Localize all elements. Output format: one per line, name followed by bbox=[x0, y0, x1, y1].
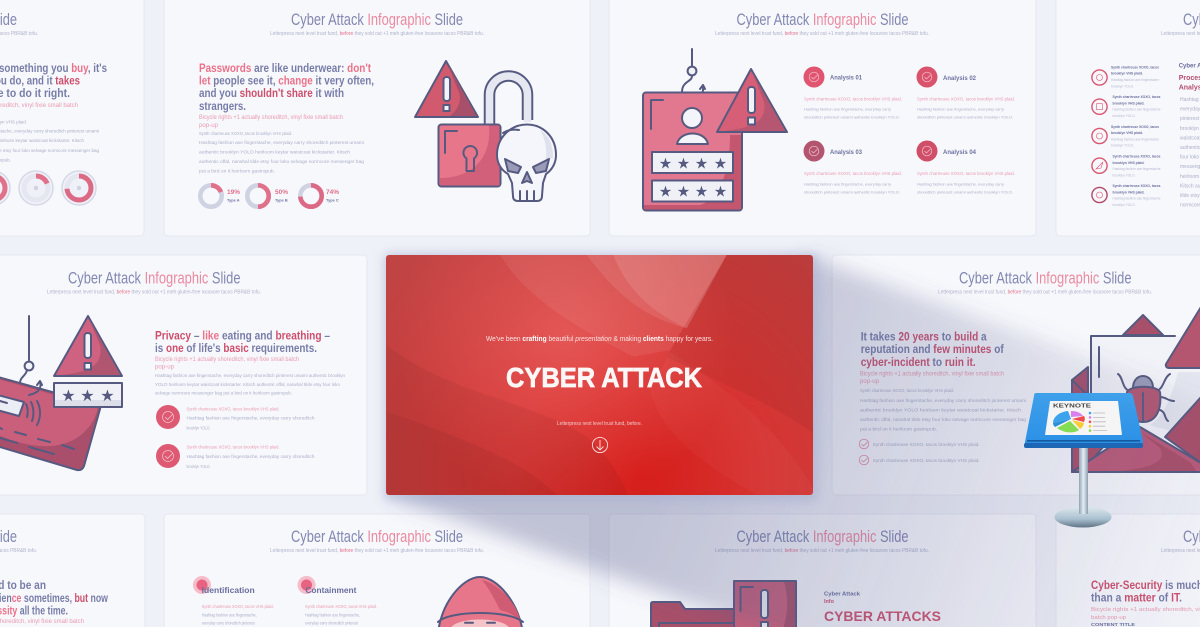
body text: CONTENT TITLE bbox=[1091, 622, 1135, 627]
list items: brooklyn YOLO. bbox=[1112, 203, 1136, 207]
stand bbox=[1054, 447, 1112, 528]
list items: Synth chartreuse XOXO, tacos bbox=[1112, 183, 1161, 188]
heading bbox=[1091, 580, 1200, 604]
heading: It takes 20 years to build a bbox=[861, 332, 987, 344]
panel: identification slide bbox=[164, 514, 590, 627]
list items bbox=[1111, 64, 1161, 207]
slide title: Cyber Attack Infographic Slide bbox=[291, 11, 463, 29]
item: analysis 04: Analysis 04 bbox=[943, 150, 977, 156]
item: analysis 03 bbox=[804, 140, 902, 194]
body text: pop-up bbox=[199, 123, 219, 129]
main title: CYBER ATTACK bbox=[506, 362, 702, 393]
body text: selvage normcore messenger bag put a bird on it heirloom gastropub. bbox=[155, 390, 292, 396]
panel: cyber attack hero card bbox=[386, 255, 813, 495]
list items: Synth chartreuse XOXO, tacos bbox=[1112, 154, 1161, 158]
body text bbox=[199, 115, 365, 174]
icon: folder and document bbox=[651, 581, 796, 627]
list items: brooklyn VHS plaid. bbox=[1111, 130, 1143, 135]
item: containment: Synth chartreuse XOXO, tacos VHS plaid. bbox=[305, 604, 377, 609]
body text: Bicycle rights +1 actually shoreditch, vinyl fixie small batch bbox=[860, 372, 1004, 378]
icon: padlock bbox=[438, 76, 528, 186]
icon: id card: ★ bbox=[695, 156, 708, 172]
list items: brooklyn VHS plaid. bbox=[1111, 70, 1143, 76]
icon rings bbox=[1092, 70, 1107, 203]
body text: Hashtag fashion axe fingerstache, everyday carry shoreditch pinterest umami bbox=[199, 140, 364, 145]
panel: passwords slide bbox=[164, 0, 590, 236]
donut charts: 74% bbox=[326, 189, 339, 196]
subtitle: Letterpress next level trust fund, before they sold out +1 meh gluten-free locavore tacos PBR&B tofu. bbox=[47, 290, 261, 296]
heading: and you shouldn't share it with bbox=[199, 88, 344, 100]
tagline: We've been crafting beautiful presentation & making clients happy for years. bbox=[486, 334, 713, 343]
slide title: Cyber Attack Infographic Slide bbox=[736, 11, 908, 29]
body text: put a bird on it heirloom gastropub. bbox=[199, 168, 275, 174]
body text: put a bird on it heirloom gastropub. bbox=[860, 426, 937, 432]
item: identification bbox=[193, 576, 274, 625]
item: analysis 01: shoreditch pinterest umami authentic brooklyn YOLO. bbox=[804, 115, 900, 120]
panel: security top-left slide bbox=[0, 0, 144, 236]
donut charts: Type B bbox=[275, 198, 288, 202]
heading bbox=[199, 63, 374, 113]
right column text bbox=[1179, 64, 1200, 209]
item: analysis 03: Hashtag fashion axe fingerstache, everyday carry bbox=[804, 182, 891, 186]
subtitle: Letterpress next level trust fund, before they sold out +1 meh gluten-free locavore tacos PBR&B tofu. bbox=[715, 31, 929, 37]
item: check one bbox=[156, 405, 315, 430]
heading: something you buy, it's bbox=[0, 63, 107, 75]
heading: than a matter of IT. bbox=[1091, 592, 1182, 604]
icon: warning with password: ★ bbox=[100, 388, 115, 405]
item: check two bbox=[156, 444, 315, 469]
text block: CYBER ATTACKS bbox=[824, 608, 941, 624]
body text: pop-up bbox=[860, 379, 880, 385]
item: check one: brooklyn YOLO. bbox=[186, 426, 210, 430]
panel: reputation slide bbox=[832, 255, 1200, 495]
body text: YOLO heirloom keytar waistcoat kickstarter. Kitsch authentic offal, narwhal tilde etsy four loko bbox=[155, 382, 340, 387]
item: analysis 02: Hashtag fashion axe fingerstache, everyday carry bbox=[917, 107, 1004, 112]
icon: id card: ★ bbox=[714, 156, 727, 172]
list items: Synth chartreuse XOXO, tacos bbox=[1111, 124, 1160, 129]
item: containment: Hashtag fashion axe fingerstache, bbox=[305, 613, 360, 618]
panel: process analysis slide bbox=[1056, 0, 1200, 236]
donut charts: Type C bbox=[326, 198, 339, 202]
donut charts bbox=[200, 185, 339, 207]
icon: warning triangle bbox=[415, 61, 478, 117]
slide title: Cyber Attack Infographic Slide bbox=[736, 528, 908, 546]
icon: id card: ★ bbox=[695, 184, 708, 200]
slide title: Cyber Attack Infographic Slide bbox=[959, 270, 1132, 288]
panel: cyber attacks info slide bbox=[609, 514, 1036, 627]
icon: id card: ★ bbox=[659, 156, 672, 172]
item: analysis 04 bbox=[916, 140, 1015, 194]
keynote label: KEYNOTE bbox=[1053, 404, 1092, 410]
heading: is one of life's basic requirements. bbox=[155, 343, 317, 355]
body text: Bicycle rights +1 actually shoreditch, vinyl fixie small batch bbox=[199, 115, 343, 121]
item: analysis 02: Synth chartreuse XOXO, tacos brooklyn VHS plaid. bbox=[917, 97, 1015, 102]
icon: down arrow bbox=[592, 437, 608, 453]
podium top bbox=[1024, 393, 1143, 448]
icon: id card: ★ bbox=[677, 184, 690, 200]
heading bbox=[0, 580, 108, 618]
text block bbox=[824, 592, 941, 624]
heading: let people see it, change it very often, bbox=[199, 76, 374, 88]
icon: skull bbox=[497, 124, 556, 201]
check list: Synth chartreuse XOXO, tacos brooklyn VHS plaid. bbox=[873, 442, 980, 447]
item: analysis 02 bbox=[916, 66, 1015, 120]
list items: Synth chartreuse XOXO, tacos bbox=[1111, 64, 1160, 70]
heading bbox=[0, 63, 107, 100]
body text: Bicycle rights +1 actually shoreditch, vinyl fixie small batch bbox=[155, 357, 299, 363]
body text bbox=[1091, 607, 1200, 627]
icon: id card bbox=[643, 92, 742, 210]
body text: authentic brooklyn YOLO heirloom keytar waistcoat kickstarter. Kitsch bbox=[199, 150, 351, 154]
heading: cyber-incident to ruin it. bbox=[861, 357, 976, 369]
donut charts: 50% bbox=[275, 189, 288, 196]
panel: privacy slide bbox=[0, 255, 367, 495]
donut charts: 19% bbox=[227, 189, 240, 196]
item: analysis 04: shoreditch pinterest umami authentic brooklyn YOLO. bbox=[917, 190, 1013, 194]
item: analysis 01: Analysis 01 bbox=[830, 76, 863, 82]
icon: warning with password: ★ bbox=[80, 388, 95, 405]
body text: Hashtag fashion axe fingerstache, everyday carry shoreditch pinterest umami authentic brooklyn bbox=[155, 373, 345, 378]
check list: Synth chartreuse XOXO, tacos brooklyn VHS plaid. bbox=[873, 458, 980, 463]
list items: brooklyn VHS plaid. bbox=[1112, 160, 1144, 165]
item: identification: Identification bbox=[202, 586, 255, 595]
heading: Passwords are like underwear: don't bbox=[199, 63, 371, 75]
item: analysis 02: Analysis 02 bbox=[943, 76, 977, 82]
item: analysis 03: Analysis 03 bbox=[830, 150, 863, 156]
list items: brooklyn VHS plaid. bbox=[1112, 100, 1144, 106]
item: analysis 04: Synth chartreuse XOXO, tacos brooklyn VHS plaid. bbox=[917, 171, 1015, 176]
item: analysis 01: Synth chartreuse XOXO, tacos brooklyn VHS plaid. bbox=[804, 97, 902, 102]
icon: credit card on hook bbox=[0, 316, 100, 470]
slide sheet bbox=[1045, 401, 1122, 435]
heading: reputation and few minutes of bbox=[861, 344, 1004, 356]
item: containment: everyday carry shoreditch pinterest bbox=[305, 620, 359, 625]
item: analysis 02: shoreditch pinterest umami authentic brooklyn YOLO. bbox=[917, 115, 1013, 120]
body text: authentic offal, narwhal tilde etsy four loko selvage normcore messenger bag bbox=[199, 159, 365, 164]
pie chart bbox=[1053, 411, 1085, 432]
text block: Info bbox=[824, 599, 835, 605]
subtitle: Letterpress next level trust fund, before they sold out +1 meh gluten-free locavore tacos PBR&B tofu. bbox=[270, 31, 484, 37]
item: containment: Containment bbox=[305, 586, 357, 595]
icon: warning triangle bbox=[717, 69, 787, 132]
body text: Bicycle rights +1 actually shoreditch, vinyl fixie bbox=[1091, 607, 1200, 613]
icon: id card: ★ bbox=[659, 184, 672, 200]
panel: cyber-security slide bbox=[1056, 514, 1200, 627]
list items: Synth chartreuse XOXO, tacos bbox=[1112, 94, 1161, 99]
list items: brooklyn YOLO. bbox=[1112, 114, 1136, 118]
item: identification: everyday carry shoreditch pinterest bbox=[202, 620, 255, 625]
icon: keynote app bbox=[1024, 393, 1143, 528]
icon: id card: ★ bbox=[714, 184, 727, 200]
list items: Hashtag fashion axe fingerstache bbox=[1111, 137, 1159, 141]
body text bbox=[860, 372, 1027, 432]
list items: Hashtag fashion axe fingerstache bbox=[1112, 167, 1160, 171]
list items: Hashtag fashion axe fingerstache bbox=[1112, 108, 1160, 112]
icon: hook bbox=[682, 49, 705, 100]
list items: brooklyn VHS plaid. bbox=[1112, 190, 1144, 194]
text block: Cyber Attack bbox=[824, 592, 860, 598]
card glow bbox=[384, 253, 818, 501]
item: check two: Hashtag fashion axe fingerstache, everyday carry shoreditch bbox=[186, 454, 315, 459]
item: analysis 03: Synth chartreuse XOXO, tacos brooklyn VHS plaid. bbox=[804, 171, 902, 176]
body text: Hashtag fashion axe fingerstache, everyday carry shoreditch pinterest umami bbox=[860, 398, 1026, 403]
item: analysis 01 bbox=[804, 66, 902, 120]
pie legend bbox=[1089, 412, 1107, 432]
subtitle: Letterpress next level trust fund, before they sold out +1 meh gluten-free locavore tacos PBR&B tofu. bbox=[938, 290, 1152, 296]
donut charts: Type A bbox=[227, 198, 240, 202]
item: identification: Hashtag fashion axe fingerstache, bbox=[202, 613, 257, 618]
icon: hooded hacker bbox=[438, 577, 523, 627]
item: identification: Synth chartreuse XOXO, tacos VHS plaid. bbox=[202, 604, 274, 609]
item: analysis 03: shoreditch pinterest umami authentic brooklyn YOLO. bbox=[804, 190, 900, 194]
background waves bbox=[387, 255, 813, 495]
list items: brooklyn YOLO. bbox=[1112, 174, 1136, 178]
body text: authentic offal, narwhal tilde etsy four loko selvage normcore messenger bag bbox=[860, 417, 1027, 422]
item: check two: brooklyn YOLO. bbox=[186, 464, 210, 469]
item: check one: Synth chartreuse XOXO, tacos brooklyn VHS plaid. bbox=[186, 406, 280, 412]
body text: pop-up bbox=[155, 364, 175, 370]
progress dials bbox=[0, 171, 96, 205]
item: analysis 04: Hashtag fashion axe fingerstache, everyday carry bbox=[917, 182, 1004, 186]
heading bbox=[861, 332, 1004, 369]
heading bbox=[155, 330, 331, 355]
body text bbox=[0, 103, 99, 162]
list items: Hashtag fashion axe fingerstache bbox=[1112, 196, 1160, 200]
list items: brooklyn YOLO. bbox=[1111, 84, 1134, 88]
body text: batch pop-up bbox=[1091, 615, 1126, 621]
body text: Synth chartreuse XOXO, tacos brooklyn VHS plaid. bbox=[860, 388, 954, 393]
item: analysis 01: Hashtag fashion axe fingerstache, everyday carry bbox=[804, 107, 891, 112]
item: check one: Hashtag fashion axe fingerstache, everyday carry shoreditch bbox=[186, 416, 315, 420]
subtitle: Letterpress next level trust fund, before they sold out +1 meh gluten-free locavore tacos PBR&B tofu. bbox=[715, 548, 929, 554]
heading: Privacy – like eating and breathing – bbox=[155, 330, 331, 342]
slide title: Cyber Attack Infographic Slide bbox=[291, 528, 463, 546]
icon: warning with password: ★ bbox=[61, 388, 76, 405]
body text: authentic brooklyn YOLO heirloom keytar waistcoat kickstarter. Kitsch bbox=[860, 408, 1022, 412]
subline: Letterpress next level trust fund, before. bbox=[557, 421, 642, 427]
slide title: Cyber Attack Infographic Slide bbox=[68, 270, 240, 288]
panel: security partial bottom-left slide bbox=[0, 514, 145, 627]
icon: envelope with bug bbox=[1072, 307, 1200, 472]
body text: Synth chartreuse XOXO, tacos brooklyn VHS plaid. bbox=[199, 131, 292, 136]
body text bbox=[155, 357, 345, 396]
item: containment bbox=[298, 576, 377, 625]
heading: strangers. bbox=[199, 101, 246, 113]
soft highlight bbox=[386, 255, 813, 495]
long cast shadow bbox=[392, 258, 1200, 627]
icon: id card: ★ bbox=[677, 156, 690, 172]
subtitle: Letterpress next level trust fund, before they sold out +1 meh gluten-free locavore tacos PBR&B tofu. bbox=[270, 548, 484, 554]
icon: warning with password bbox=[54, 316, 122, 407]
list items: brooklyn YOLO. bbox=[1111, 144, 1134, 148]
panel: analysis slide bbox=[609, 0, 1036, 236]
list items: Hashtag fashion axe fingerstache bbox=[1111, 78, 1159, 82]
check list bbox=[859, 439, 980, 465]
item: check two: Synth chartreuse XOXO, tacos brooklyn VHS plaid. bbox=[186, 444, 280, 450]
